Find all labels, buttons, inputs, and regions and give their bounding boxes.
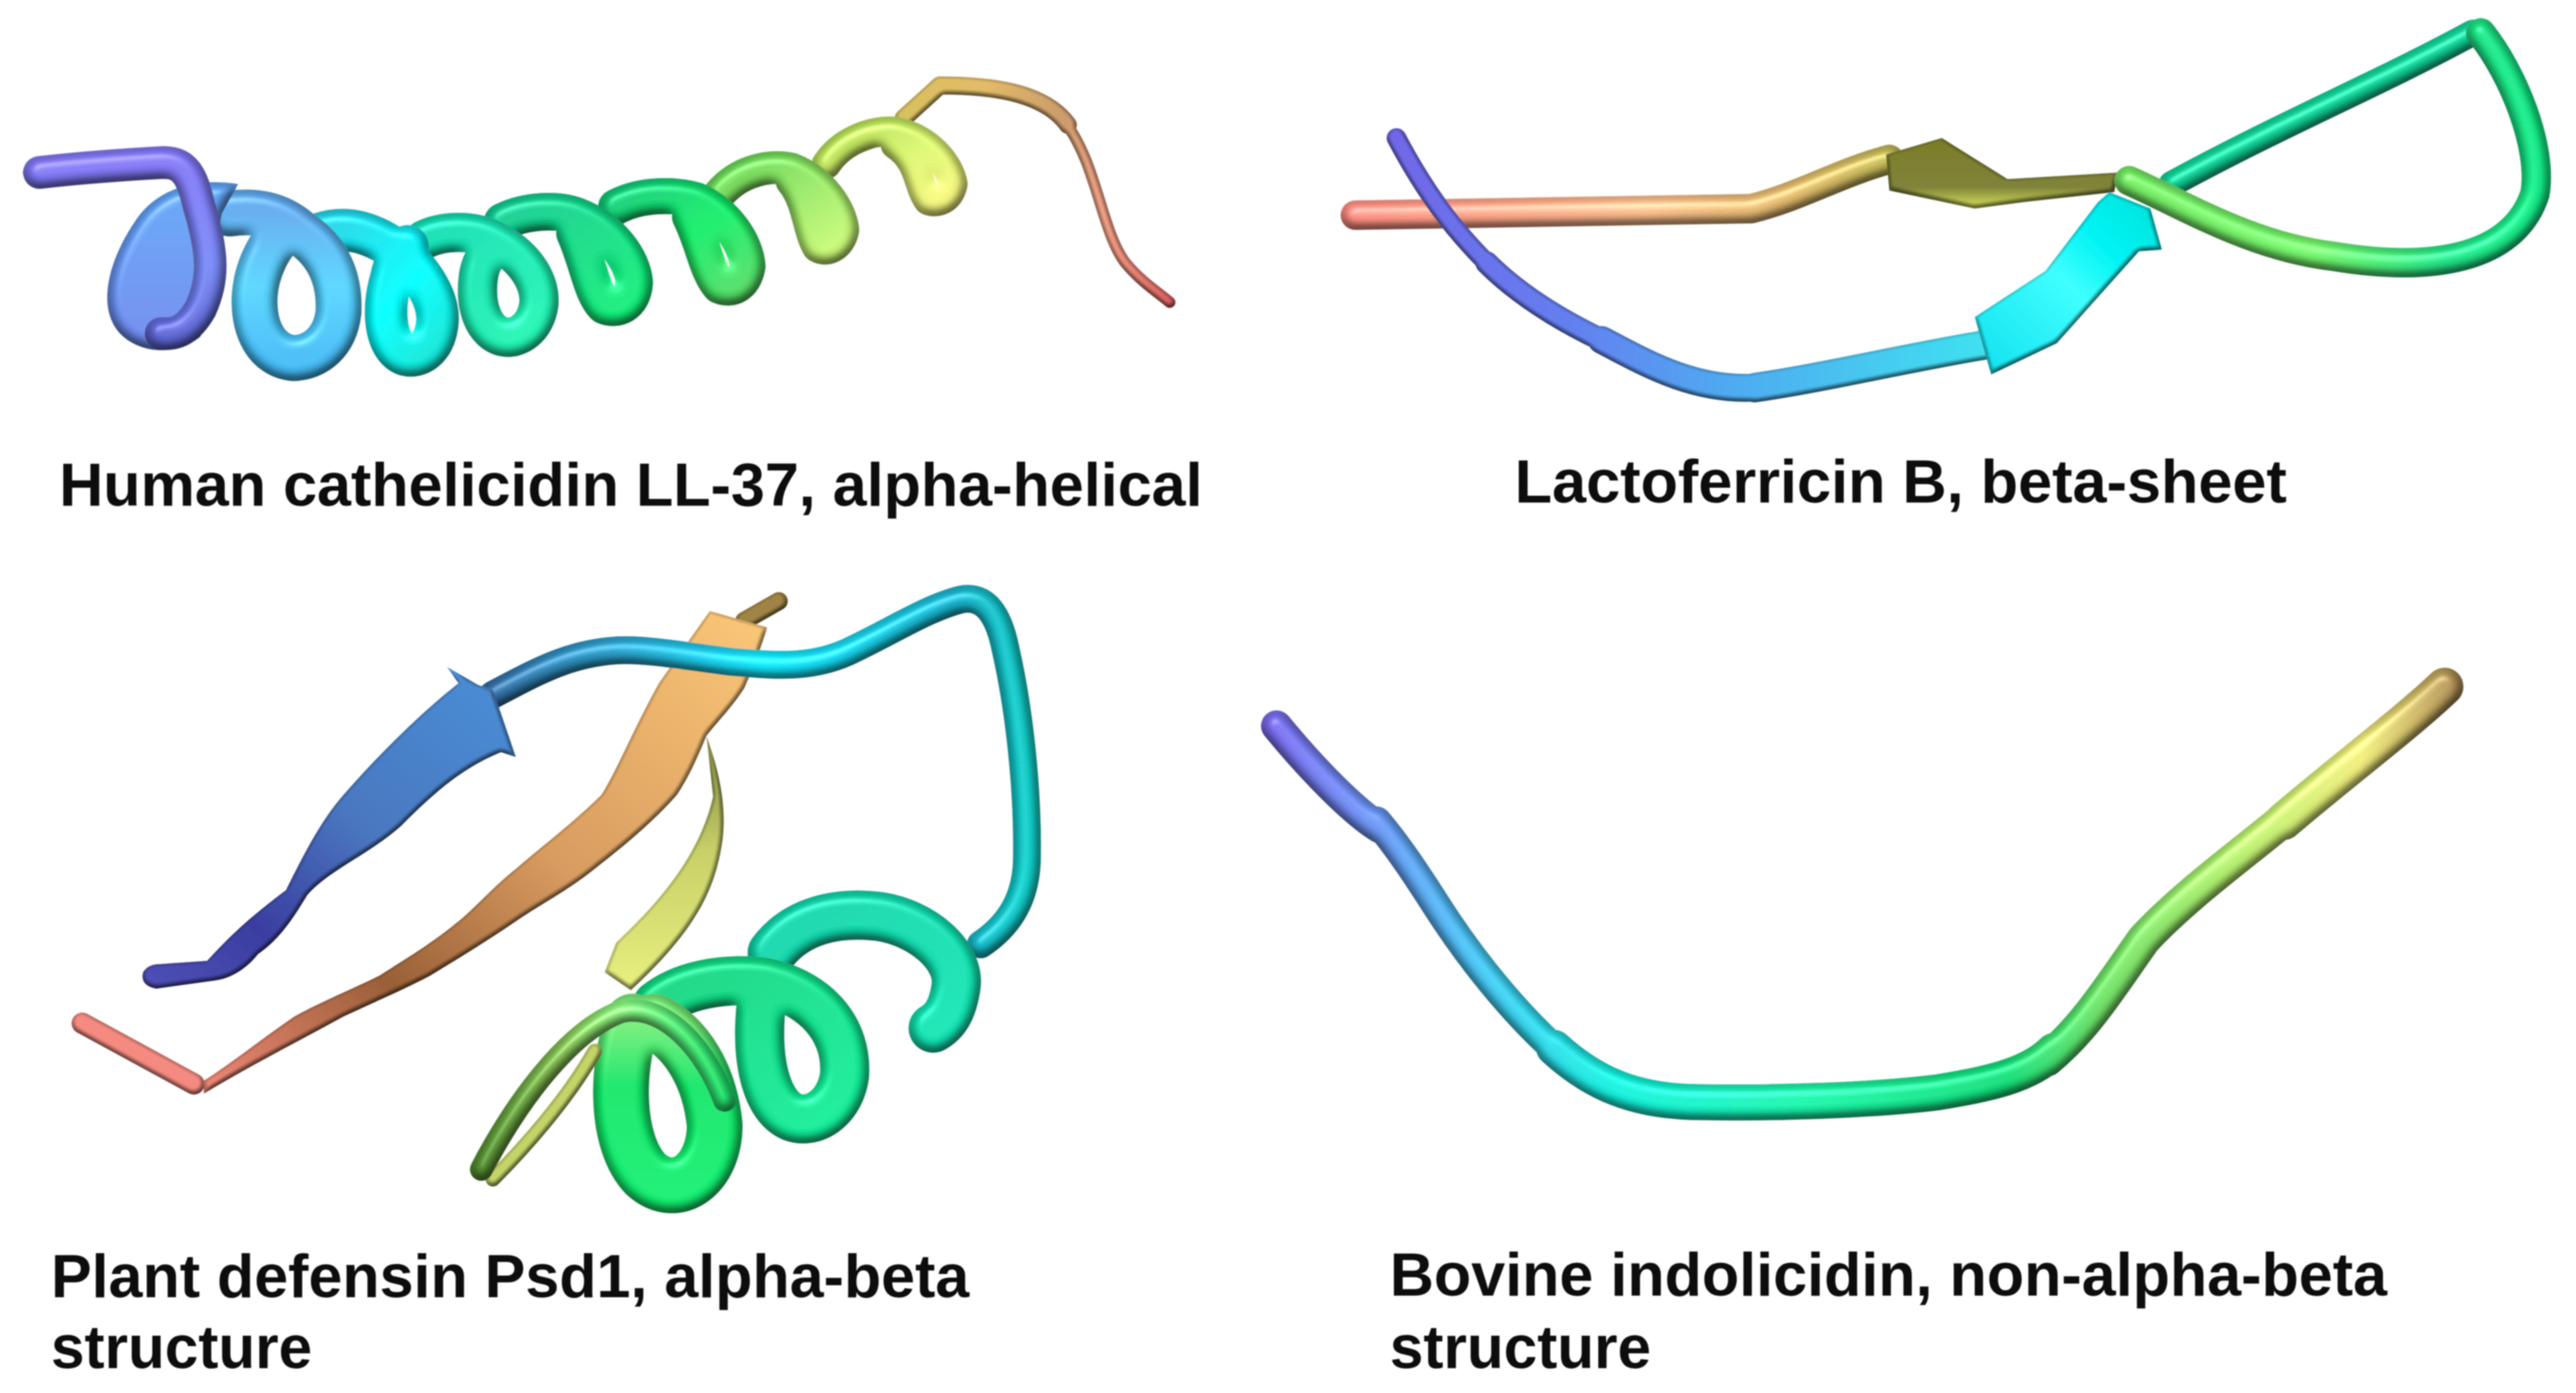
teal connecting tube (493, 599, 1027, 944)
blue beta arrow (143, 667, 516, 989)
panel: bovine indolicidin (1276, 687, 2445, 1382)
helix outer arc (481, 1011, 725, 1169)
label: indolicidin second line: structure (1390, 1314, 1651, 1382)
olive beta arrow (1886, 138, 2117, 208)
panel: lactoferricin B (1356, 33, 2536, 516)
panel: human cathelicidin LL-37 (39, 86, 1203, 519)
back green tube (2172, 33, 2473, 184)
helix turn 3 (322, 230, 438, 355)
label: lactoferricin B: Lactoferricin B, beta-sheet (1514, 448, 2287, 516)
cyan beta arrow (1975, 192, 2162, 374)
panel: plant defensin Psd1 (51, 599, 1027, 1382)
alpha helix ribbon model (39, 86, 1170, 358)
purple to blue tube (1397, 138, 1984, 388)
alpha-beta ribbon model (83, 599, 1027, 1185)
helix turn 2 (230, 212, 338, 358)
non-alpha-beta tube model (1276, 687, 2445, 1102)
tan beta strand (204, 611, 767, 1094)
label: Psd1: Plant defensin Psd1, alpha-beta (51, 1243, 970, 1311)
yellow ribbon (605, 736, 724, 991)
label: LL-37: Human cathelicidin LL-37, alpha-helical (59, 451, 1203, 519)
label: indolicidin: Bovine indolicidin, non-alpha-beta (1390, 1242, 2388, 1310)
helix turn 1 back (107, 182, 238, 350)
salmon tube (1356, 159, 1889, 215)
helix turn A (772, 915, 956, 1028)
beta-sheet ribbon model (1356, 33, 2536, 388)
helix turn 6 (616, 196, 747, 288)
helix N-terminal tube and turn 1 front (39, 163, 210, 333)
front green tube (2129, 33, 2536, 263)
helix turn 8 (827, 131, 952, 201)
helix C-terminal tail (904, 86, 1170, 302)
label: Psd1 second line: structure (51, 1314, 312, 1382)
helix inner return (493, 1051, 595, 1179)
olive tip (744, 601, 778, 621)
helix turn B (657, 981, 845, 1119)
helix turn C (621, 1022, 714, 1185)
helix turn 5 (503, 212, 634, 307)
helix turn 4 (424, 232, 539, 337)
helix turn 7 (720, 168, 843, 248)
salmon tube (83, 1024, 194, 1084)
